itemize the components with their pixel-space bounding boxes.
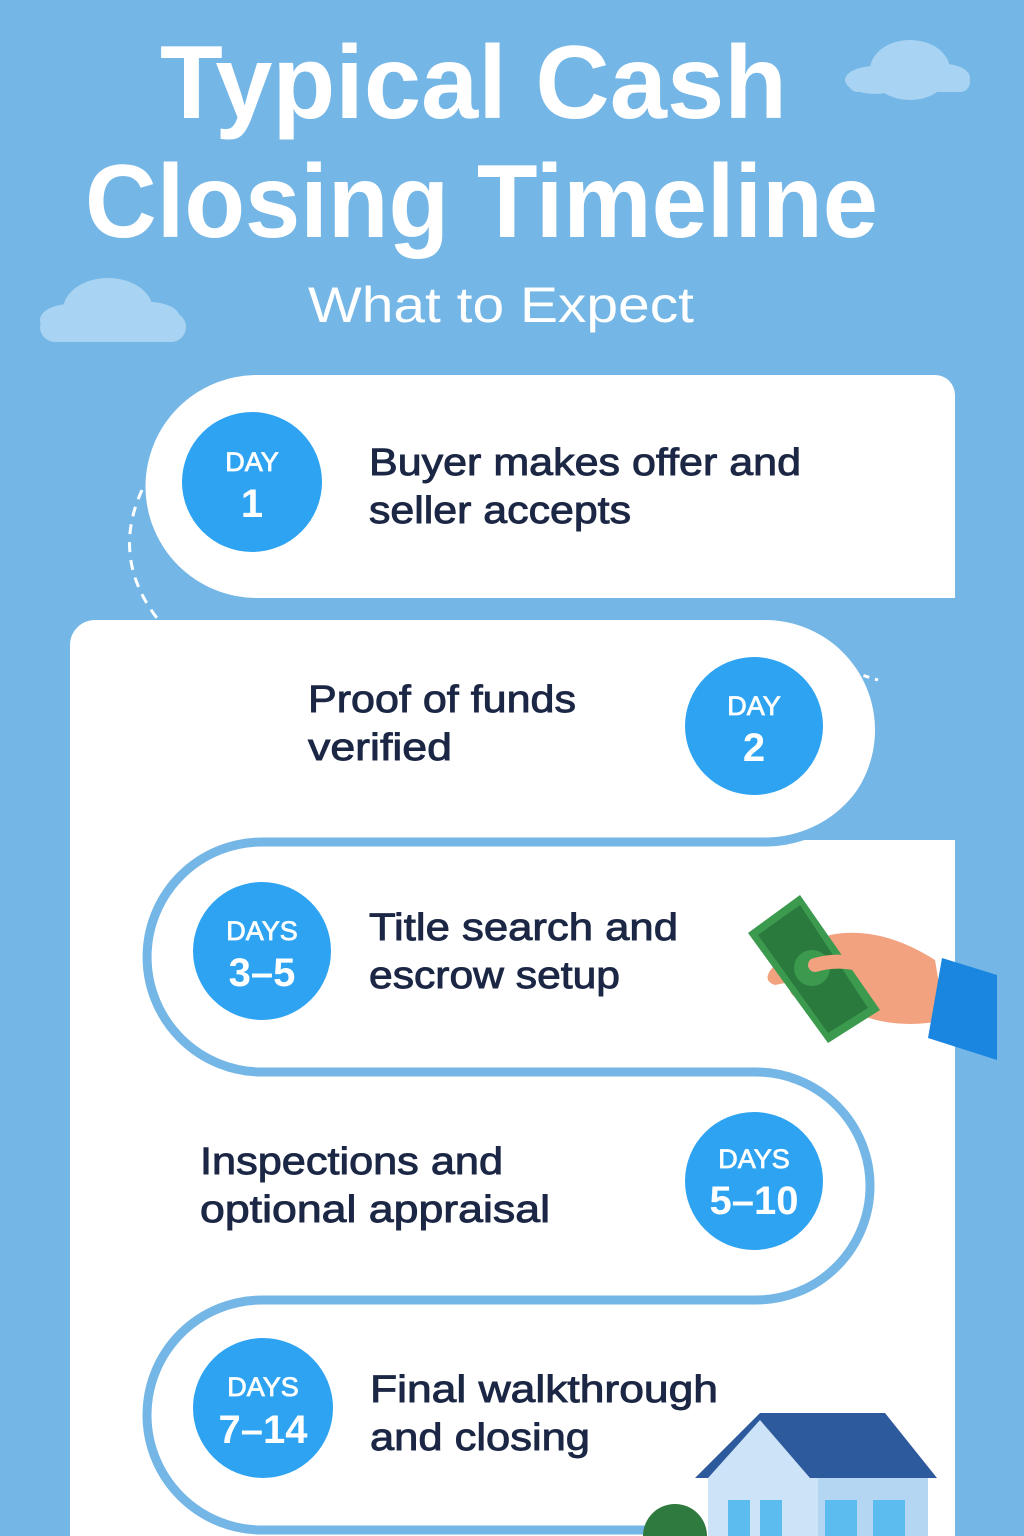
- step 2: [308, 657, 823, 795]
- step 4: [200, 1112, 823, 1250]
- icon: house: [643, 1413, 937, 1536]
- subtitle: What to Expect: [308, 277, 694, 333]
- title: Closing Timeline: [85, 144, 878, 260]
- title: Typical Cash: [160, 25, 787, 141]
- step 1: seller accepts: [369, 490, 631, 532]
- icon: hand with money: [748, 895, 997, 1060]
- step 1: 1: [241, 482, 263, 526]
- step 2: 2: [743, 726, 765, 770]
- step 4: DAYS: [718, 1144, 790, 1174]
- step 5: 7–14: [219, 1408, 308, 1452]
- step 3: Title search and: [369, 907, 678, 949]
- step 4: 5–10: [710, 1179, 798, 1223]
- step 5: and closing: [370, 1417, 590, 1459]
- step 1: Buyer makes offer and: [369, 442, 801, 484]
- step 3: [193, 882, 678, 1020]
- step 1: [182, 412, 801, 552]
- step 2: DAY: [727, 691, 781, 721]
- step 5: DAYS: [227, 1372, 299, 1402]
- step 4: Inspections and: [200, 1141, 503, 1183]
- cloud: top right: [845, 40, 970, 100]
- step 5: Final walkthrough: [370, 1369, 718, 1411]
- cloud: left: [40, 278, 186, 342]
- serpentine path: [147, 606, 883, 1530]
- step 2: verified: [308, 727, 452, 769]
- timeline card: [70, 375, 955, 1536]
- title: [85, 25, 878, 260]
- step 4: optional appraisal: [200, 1189, 550, 1231]
- step 5: [193, 1338, 718, 1478]
- step 1: DAY: [225, 447, 279, 477]
- step 3: 3–5: [229, 951, 295, 995]
- step 3: DAYS: [226, 916, 298, 946]
- step 2: Proof of funds: [308, 679, 576, 721]
- step 3: escrow setup: [369, 955, 620, 997]
